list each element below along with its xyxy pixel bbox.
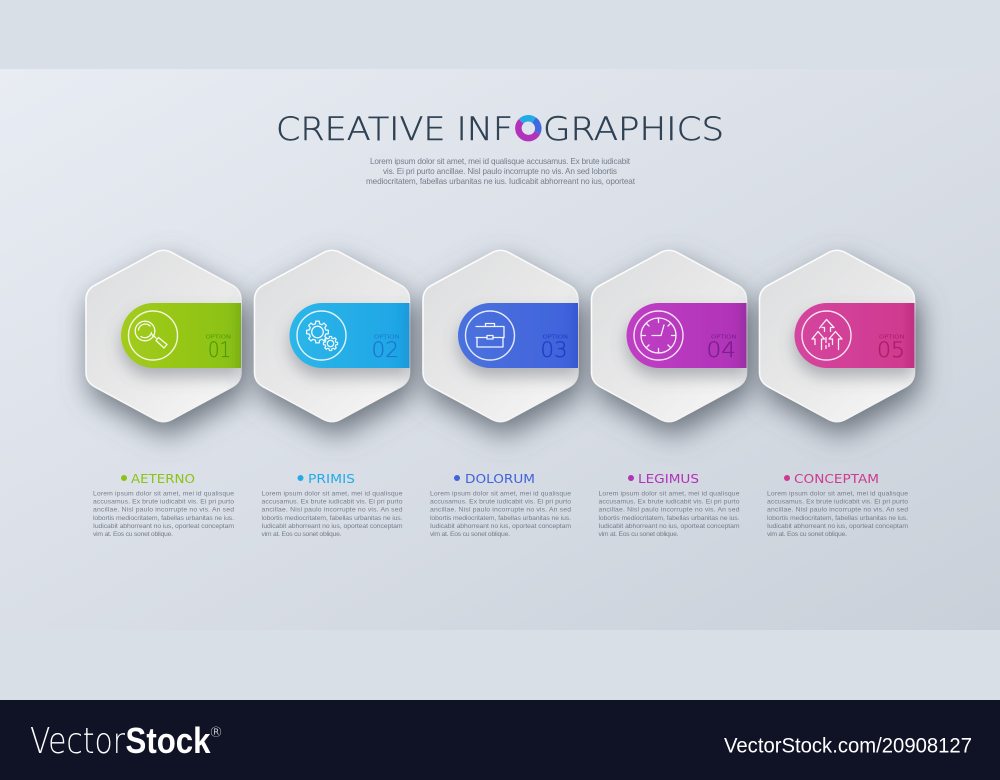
panel: option 04: OPTION — [711, 334, 736, 340]
text block: primis: Iudicabit abhorreant no ius, oporteat conceptam — [262, 523, 403, 530]
text block: primis: ancillae. Nisl paulo incorrupte no vis. An sed — [262, 507, 403, 514]
panel: option 02: OPTION — [374, 334, 400, 340]
footer logo: Stock — [126, 720, 211, 761]
panel: option 05: OPTION — [879, 334, 904, 340]
footer logo: Vector — [30, 721, 125, 762]
panel: option 01: OPTION — [206, 334, 231, 340]
text block: conceptam: ancillae. Nisl paulo incorrupte no vis. An sed — [767, 507, 908, 514]
text block: dolorum: lobortis mediocritatem, fabellas urbanitas ne ius. — [430, 515, 571, 522]
panel: option 04: 04 — [706, 338, 736, 363]
text block: legimus — [598, 490, 740, 538]
title: GRAPHICS — [543, 110, 724, 148]
text block: legimus: ancillae. Nisl paulo incorrupte no vis. An sed — [598, 507, 740, 514]
footer logo — [30, 720, 223, 762]
panel: option 01: 01 — [208, 338, 231, 363]
text block: aeterno: lobortis mediocritatem, fabellas urbanitas ne ius. — [93, 515, 234, 522]
text block: conceptam: vim at. Eos cu sonet oblique. — [767, 531, 847, 538]
label: primis: PRIMIS — [308, 471, 355, 486]
label: legimus: LEGIMUS — [638, 471, 699, 486]
text block: dolorum: Lorem ipsum dolor sit amet, mei id qualisque — [430, 490, 571, 498]
text block: aeterno: ancillae. Nisl paulo incorrupte no vis. An sed — [93, 507, 234, 514]
text block: primis: accusamus. Ex brute iudicabit vis. Ei pri purto — [262, 499, 403, 506]
intro text: vis. Ei pri purto ancillae. Nisl paulo incorrupte no vis. An sed lobortis — [383, 167, 617, 176]
text block: aeterno: accusamus. Ex brute iudicabit vis. Ei pri purto — [93, 499, 234, 506]
text block: aeterno — [93, 490, 234, 538]
text block: legimus: Iudicabit abhorreant no ius, oporteat conceptam — [598, 523, 740, 530]
label: aeterno: AETERNO — [131, 471, 195, 486]
label: dolorum: DOLORUM — [465, 471, 535, 486]
icon: briefcase — [476, 324, 504, 347]
intro text: mediocritatem, fabellas urbanitas ne ius. Iudicabit abhorreant no ius, oporteat — [366, 177, 636, 186]
text block: legimus: lobortis mediocritatem, fabellas urbanitas ne ius. — [598, 515, 740, 522]
text block: legimus: vim at. Eos cu sonet oblique. — [598, 531, 679, 538]
panel: option 02 — [254, 250, 410, 422]
text block: legimus: Lorem ipsum dolor sit amet, mei id qualisque — [598, 490, 740, 498]
text block: primis: Lorem ipsum dolor sit amet, mei id qualisque — [262, 490, 403, 498]
panel: option 04 — [592, 250, 746, 422]
intro text — [366, 157, 636, 186]
text block: dolorum — [430, 490, 571, 538]
panel: option 05 — [760, 250, 914, 422]
intro text: Lorem ipsum dolor sit amet, mei id qualisque accusamus. Ex brute iudicabit — [370, 157, 631, 166]
text block: aeterno: Lorem ipsum dolor sit amet, mei id qualisque — [93, 490, 234, 498]
label: conceptam: CONCEPTAM — [794, 471, 879, 486]
text block: conceptam: Iudicabit abhorreant no ius, oporteat conceptam — [767, 523, 908, 530]
panel: option 02: 02 — [372, 338, 399, 363]
title: CREATIVE INF — [276, 110, 513, 148]
text block: aeterno: Iudicabit abhorreant no ius, oporteat conceptam — [93, 523, 234, 530]
title — [276, 110, 724, 148]
text block: primis: vim at. Eos cu sonet oblique. — [262, 531, 342, 538]
icon: clock — [641, 318, 676, 353]
icon: title donut letter — [518, 118, 538, 138]
text block: conceptam — [767, 490, 908, 538]
panel: option 01 — [86, 250, 241, 422]
panel: option 03 — [423, 250, 578, 422]
text block: dolorum: Iudicabit abhorreant no ius, oporteat conceptam — [430, 523, 571, 530]
text block: dolorum: accusamus. Ex brute iudicabit vis. Ei pri purto — [430, 499, 571, 506]
text block: dolorum: vim at. Eos cu sonet oblique. — [430, 531, 510, 538]
icon: magnifier — [135, 321, 167, 348]
panel: option 05: 05 — [877, 338, 905, 363]
text block: conceptam: Lorem ipsum dolor sit amet, mei id qualisque — [767, 490, 908, 498]
text block: conceptam: lobortis mediocritatem, fabellas urbanitas ne ius. — [767, 515, 908, 522]
text block: legimus: accusamus. Ex brute iudicabit vis. Ei pri purto — [598, 499, 740, 506]
panel: option 03: 03 — [540, 338, 568, 363]
text block: conceptam: accusamus. Ex brute iudicabit vis. Ei pri purto — [767, 499, 908, 506]
text block: primis — [262, 490, 403, 538]
panel: option 03: OPTION — [542, 334, 568, 340]
icon: rising arrows — [812, 320, 842, 350]
text block: aeterno: vim at. Eos cu sonet oblique. — [93, 531, 173, 538]
footer bar — [0, 700, 1000, 780]
text block: dolorum: ancillae. Nisl paulo incorrupte no vis. An sed — [430, 507, 571, 514]
footer image id: VectorStock.com/20908127 — [724, 734, 972, 758]
footer logo: ® — [209, 725, 223, 741]
icon: gears — [307, 321, 338, 351]
text block: primis: lobortis mediocritatem, fabellas urbanitas ne ius. — [262, 515, 403, 522]
